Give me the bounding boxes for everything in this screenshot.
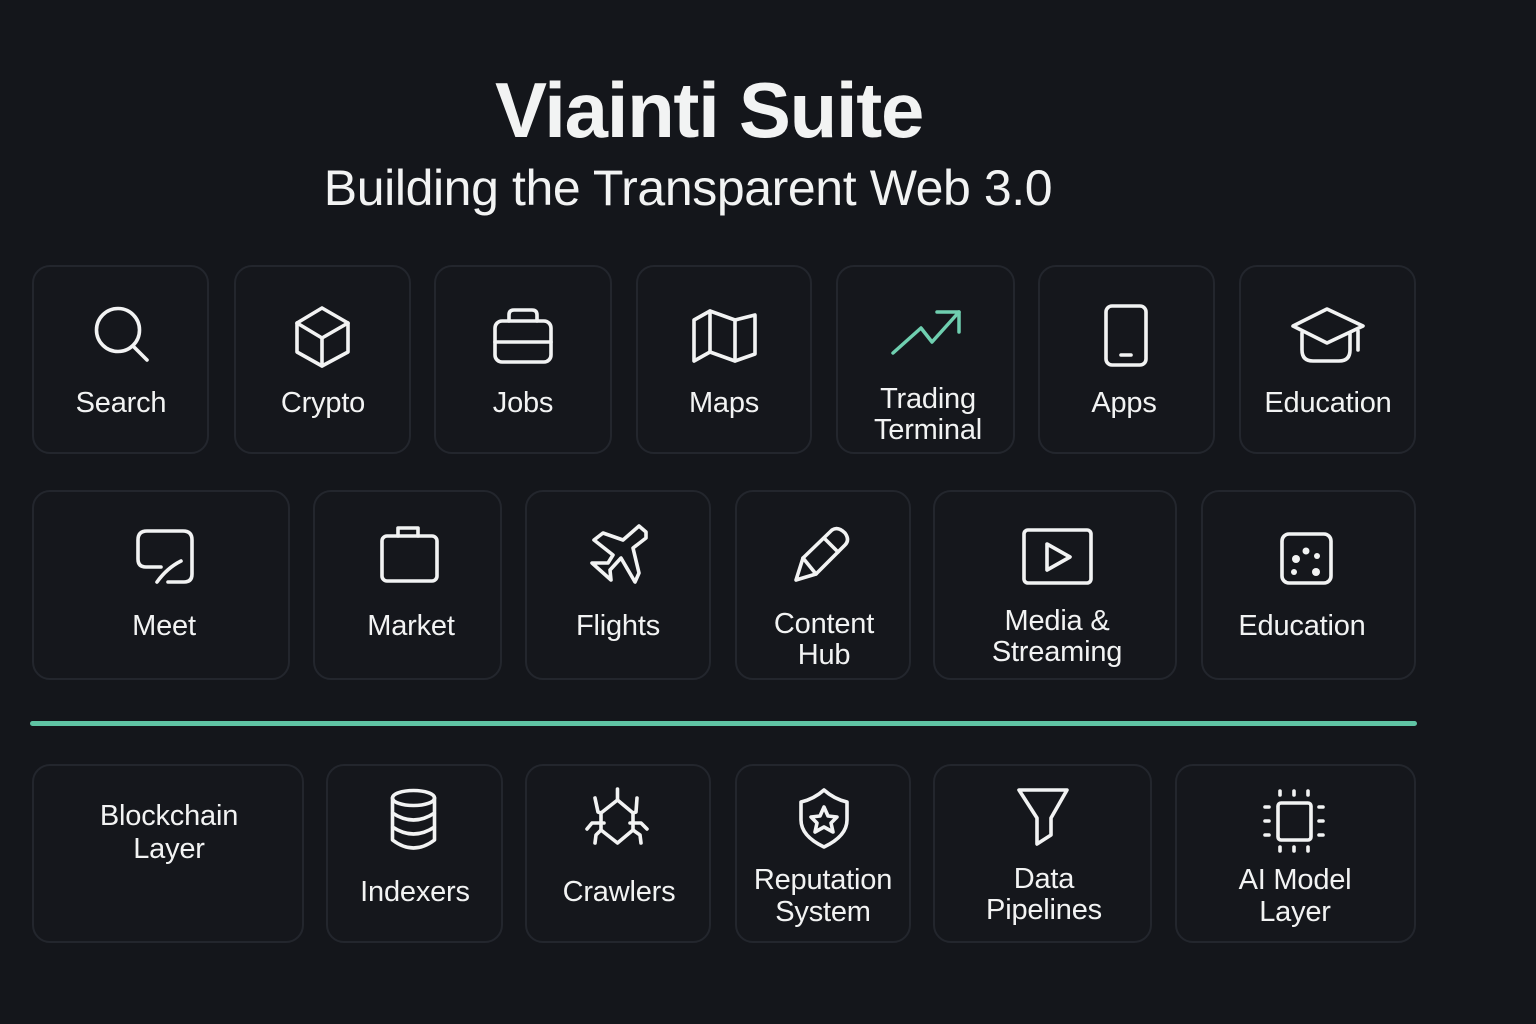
panel: trading terminal [836,265,1015,454]
panel: education second [1201,490,1416,680]
panel: reputation system [735,764,911,943]
panel: flights [525,490,711,680]
label: Trading Terminal [874,383,982,446]
label: Reputation System [754,864,892,928]
icon: trend arrow [893,312,959,353]
panel: education [1239,265,1416,454]
panel: media and streaming [933,490,1177,680]
icon: pencil [796,529,848,580]
label: Apps: Apps [1091,387,1157,419]
panel: ai model layer [1175,764,1416,943]
label: AI Model Layer [1238,864,1351,928]
panel: maps [636,265,812,454]
title: Viainti Suite [495,66,923,154]
panel: crawlers [525,764,711,943]
panel: crypto [234,265,411,454]
panel: indexers [326,764,503,943]
panel: apps [1038,265,1215,454]
icon: cube [297,308,348,366]
label: Crawlers: Crawlers [563,876,675,908]
label: Meet: Meet [132,610,196,642]
icon: dice [1282,534,1331,583]
label: Jobs: Jobs [493,387,553,419]
icon: dice dots [1291,548,1320,576]
panel: data pipelines [933,764,1152,943]
label: Blockchain Layer: Blockchain [100,800,238,832]
icon: shield star [801,790,847,847]
subtitle: Building the Transparent Web 3.0 [324,160,1052,216]
divider line [30,721,1417,726]
label: Maps: Maps [689,387,759,419]
label: Crypto: Crypto [281,387,365,419]
label: AI Model Layer: Layer [1259,896,1331,928]
icon: search [96,308,147,360]
icon: database [392,790,434,848]
label: Indexers: Indexers [360,876,470,908]
label: Blockchain Layer [100,800,238,865]
label: Data Pipelines [986,863,1102,926]
label: Media and Streaming: Media & [1004,605,1110,637]
panel: search [32,265,209,454]
label: Reputation System: System [775,896,871,928]
panel: market [313,490,502,680]
label: Content Hub [774,608,874,671]
label: Trading Terminal: Terminal [874,414,982,446]
icon: airplane [592,526,646,582]
label: Education: Education [1264,387,1392,419]
label: Blockchain Layer: Layer [133,833,205,865]
label: Market: Market [367,610,455,642]
label: Education second: Education [1238,610,1366,642]
icon: chat bubble [138,531,192,582]
label: Data Pipelines: Data [1014,863,1074,895]
icon: market case [382,528,437,581]
panel: meet [32,490,290,680]
icon: bug [587,789,647,843]
label: Reputation System: Reputation [754,864,892,896]
label: Data Pipelines: Pipelines [986,894,1102,926]
label: Trading Terminal: Trading [880,383,976,415]
label: Media and Streaming [992,605,1122,668]
label: Content Hub: Hub [798,639,850,671]
icon: briefcase [495,310,551,362]
label: Flights: Flights [576,610,660,642]
panel: blockchain layer [32,764,304,943]
panel: content hub [735,490,911,680]
icon: funnel [1019,790,1067,844]
label: Search: Search [76,387,166,419]
label: Media and Streaming: Streaming [992,636,1122,668]
icon: graduation cap [1293,309,1363,361]
icon: phone [1106,306,1146,365]
icon: map [694,311,755,361]
panel: jobs [434,265,612,454]
icon: chip [1265,791,1323,851]
icon: play screen [1024,530,1091,583]
label: AI Model Layer: AI Model [1239,864,1351,896]
label: Content Hub: Content [774,608,874,640]
